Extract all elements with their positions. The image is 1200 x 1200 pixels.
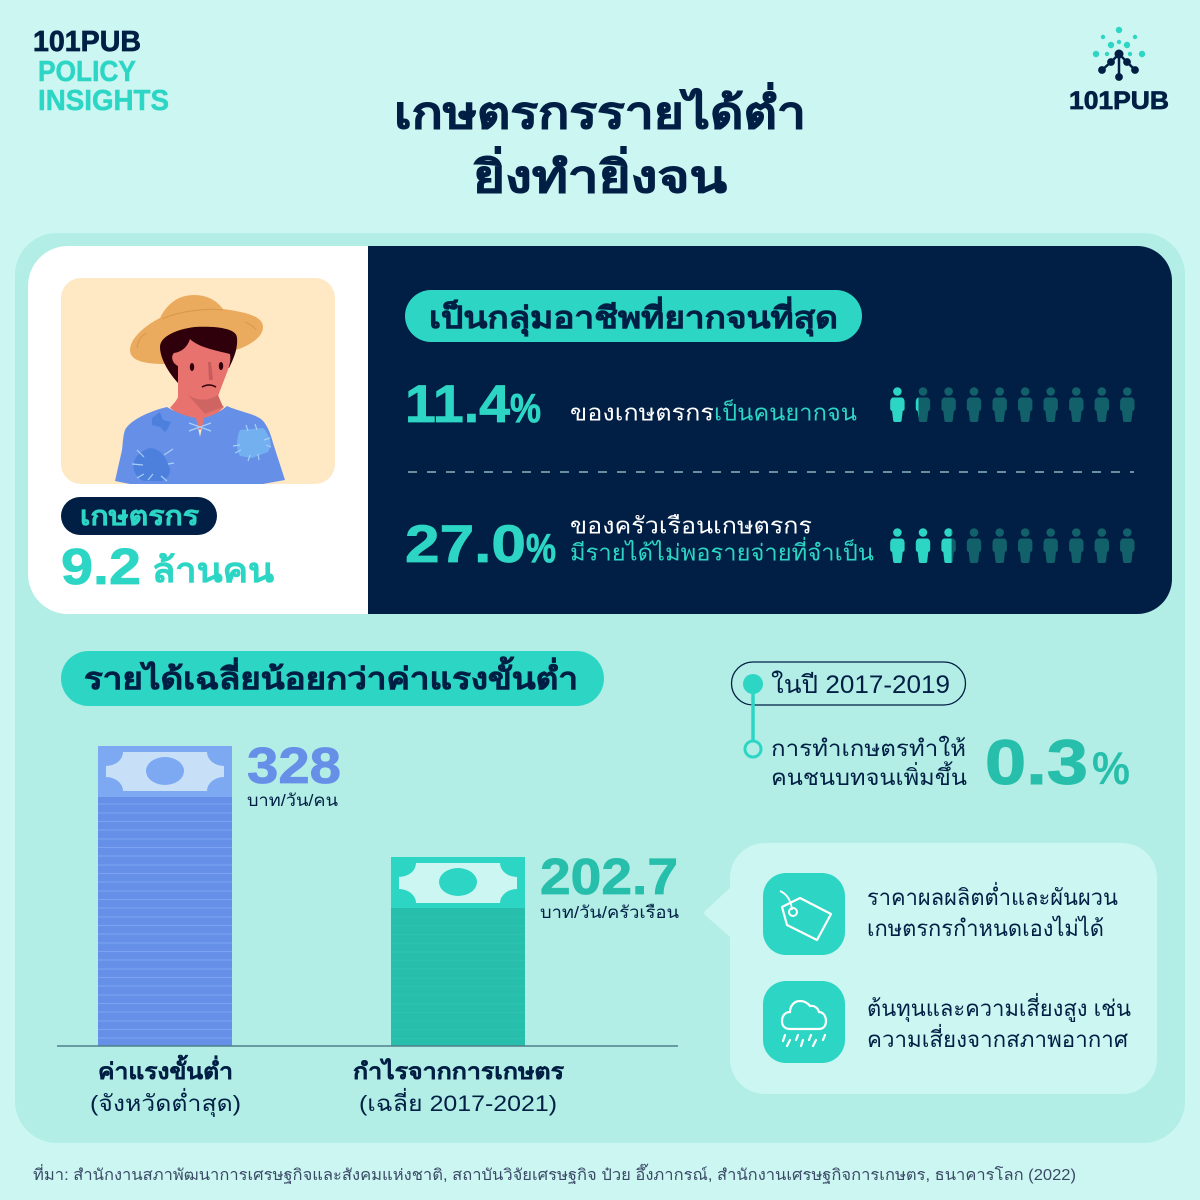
label: farmer pill (61, 497, 217, 535)
heading pill: income below minimum wage: รายได้เฉลี่ยน้อยกว่าค่าแรงขั้นต่ำ (84, 656, 578, 696)
axis label: farm profit: (เฉลี่ย 2017-2021) (359, 1087, 557, 1116)
heading pill: poorest group (405, 290, 862, 342)
text: low price: เกษตรกรกำหนดเองไม่ได้ (867, 915, 1104, 941)
axis label: farm profit (353, 1058, 564, 1116)
title: เกษตรกรรายได้ต่ำ (394, 82, 806, 138)
stat: 11.4 percent: % (510, 385, 541, 431)
stat: 27.0 percent (405, 515, 556, 574)
text: high cost and risk: ความเสี่ยงจากสภาพอากาศ (867, 1023, 1129, 1052)
axis label: minimum wage: ค่าแรงขั้นต่ำ (98, 1054, 233, 1084)
axis label: minimum wage (90, 1054, 241, 1117)
text: high cost and risk (867, 992, 1131, 1052)
text: farmers who are poor: ของเกษตรกร (570, 400, 714, 426)
value: 328 baht per day per person: 328 (247, 737, 341, 794)
logo: 101PUB network mark (1069, 27, 1169, 115)
text: farmers who are poor (570, 398, 857, 426)
callout: rural poverty 2017-2019: ในปี 2017-2019 (771, 670, 950, 699)
stat: 9.2 million farmers: ล้านคน (152, 552, 274, 590)
stat: 9.2 million farmers: 9.2 (61, 538, 141, 595)
bar: minimum wage banknote stack (98, 746, 232, 1046)
axis label: minimum wage: (จังหวัดต่ำสุด) (90, 1087, 241, 1117)
heading pill: poorest group: เป็นกลุ่มอาชีพที่ยากจนที่สุด (429, 296, 838, 337)
logo: 101PUB Policy Insights: POLICY (38, 56, 136, 88)
source note: ที่มา: สำนักงานสภาพัฒนาการเศรษฐกิจและสังคมแห่งชาติ, สถาบันวิจัยเศรษฐกิจ ป๋วย อึ๊งภากรณ์, สำนักงานเศรษฐกิจการเกษตร, ธนาคารโลก (2022) (33, 1163, 1076, 1184)
text: low price: ราคาผลผลิตต่ำและผันผวน (867, 881, 1118, 910)
callout: rural poverty 2017-2019: % (1092, 742, 1130, 794)
panel: reasons callout (704, 843, 1157, 1094)
pictogram: 27 percent of people (890, 528, 1135, 563)
panel: main background (15, 233, 1185, 1143)
value: 202.7 baht per day per household: 202.7 (540, 848, 678, 905)
panel: poorest occupation group (368, 246, 1172, 614)
logo: 101PUB Policy Insights (33, 26, 169, 117)
stat: 11.4 percent: 11.4 (405, 375, 511, 434)
stat: 9.2 million farmers (61, 538, 274, 595)
text: low price (867, 881, 1118, 941)
text: households with insufficient income (570, 512, 874, 566)
callout: rural poverty 2017-2019 (732, 662, 1130, 798)
value: 202.7 baht per day per household: บาท/วัน/ครัวเรือน (540, 903, 679, 922)
text: high cost and risk: ต้นทุนและความเสี่ยงสูง เช่น (867, 992, 1131, 1022)
icon: price tag (763, 873, 845, 955)
callout: rural poverty 2017-2019: 0.3 (985, 728, 1088, 798)
title: ยิ่งทำยิ่งจน (473, 146, 727, 202)
bar: farm profit banknote stack (391, 857, 525, 1046)
text: households with insufficient income: มีรายได้ไม่พอรายจ่ายที่จำเป็น (570, 536, 874, 566)
logo: 101PUB Policy Insights: 101PUB (33, 26, 141, 58)
callout: rural poverty 2017-2019: การทำเกษตรทำให้ (771, 736, 966, 761)
stat: 27.0 percent: % (526, 525, 556, 571)
illustration: farmer portrait (61, 278, 335, 484)
heading pill: income below minimum wage (61, 651, 604, 706)
title (394, 82, 806, 202)
label: farmer pill: เกษตรกร (80, 501, 200, 531)
pictogram: 11.4 percent of people (890, 387, 1135, 422)
axis label: farm profit: กำไรจากการเกษตร (353, 1058, 564, 1084)
icon: rain cloud (763, 981, 845, 1063)
stat: 27.0 percent: 27.0 (405, 515, 526, 574)
panel: farmer population (28, 246, 368, 614)
text: farmers who are poor: เป็นคนยากจน (714, 398, 857, 426)
text: households with insufficient income: ของครัวเรือนเกษตรกร (570, 512, 812, 538)
logo: 101PUB Policy Insights: INSIGHTS (38, 85, 169, 117)
value: 328 baht per day per person: บาท/วัน/คน (247, 791, 338, 810)
callout: rural poverty 2017-2019: คนชนบทจนเพิ่มขึ้น (771, 761, 967, 790)
logo: 101PUB network mark: 101PUB (1069, 87, 1169, 115)
